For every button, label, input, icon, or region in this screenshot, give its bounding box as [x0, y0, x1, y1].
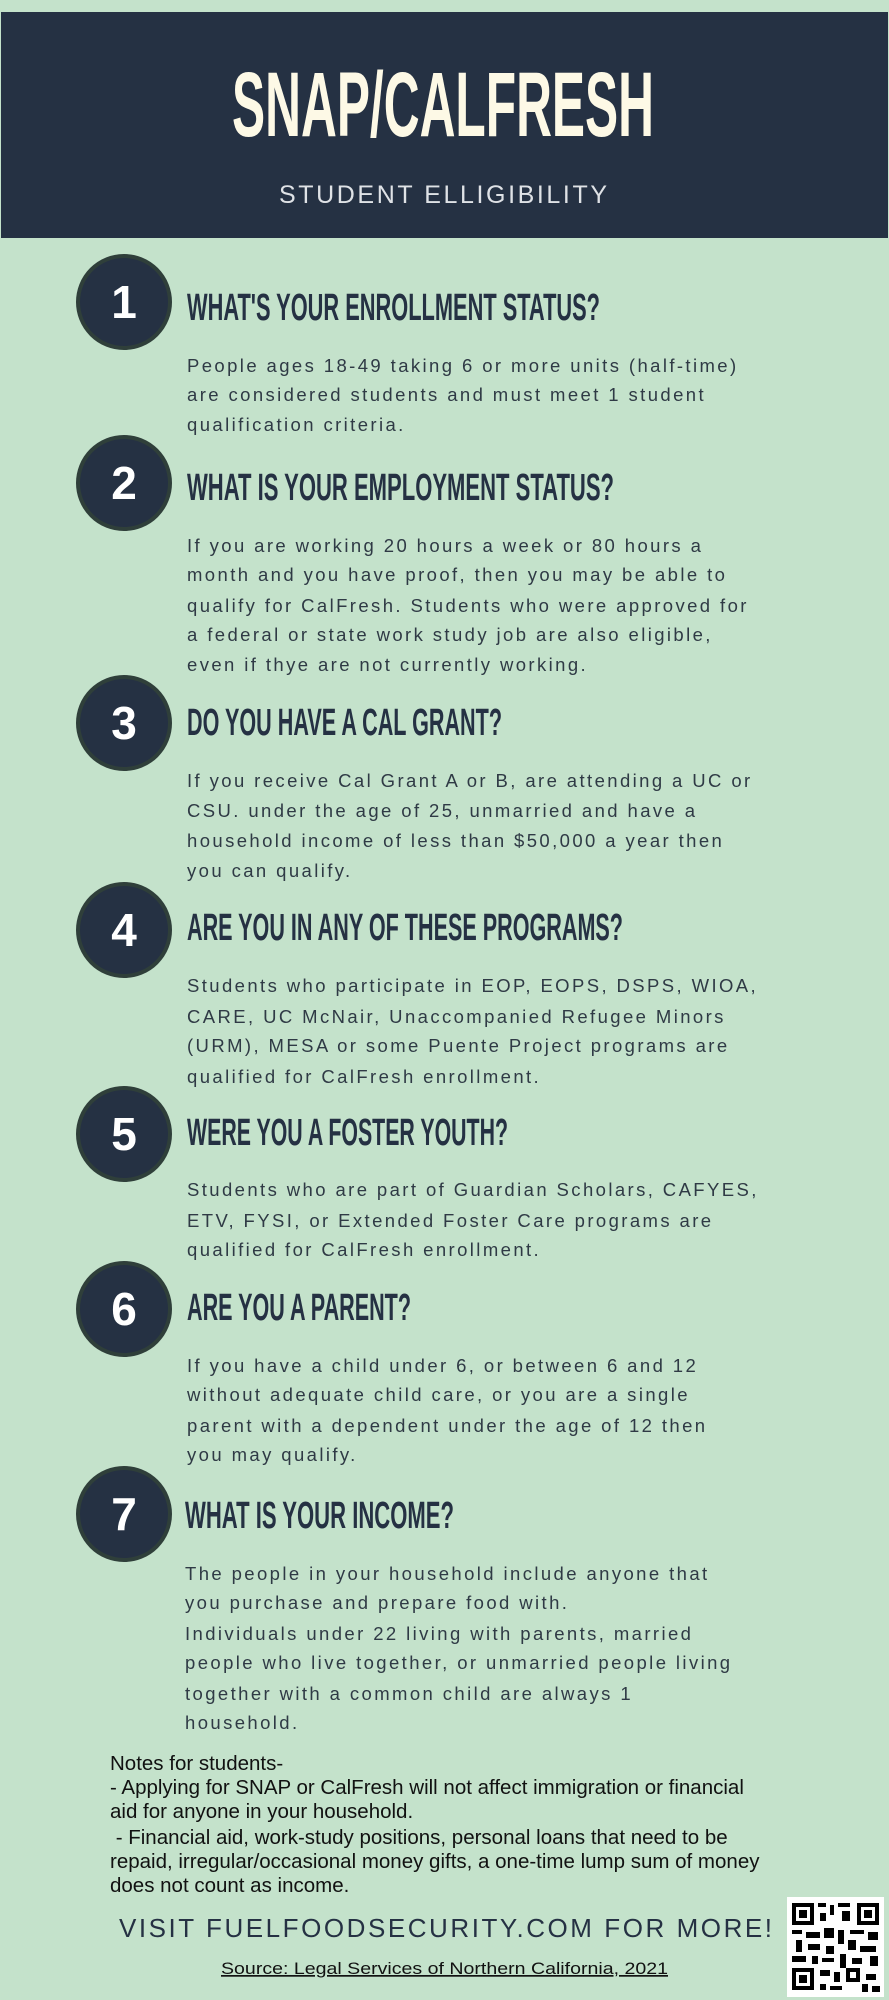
call to action: VISIT FUELFOODSECURITY.COM FOR MORE! — [119, 1913, 772, 1943]
icon: number 7 circle: 7 — [111, 1488, 137, 1540]
body 7: you purchase and prepare food with. — [185, 1592, 569, 1613]
icon: number 6 circle — [78, 1263, 170, 1355]
icon: number 1 circle: 1 — [111, 276, 137, 328]
icon: number 3 circle — [78, 677, 170, 769]
body 1: are considered students and must meet 1 student — [187, 384, 706, 405]
header banner — [1, 12, 888, 238]
notes for students: - Applying for SNAP or CalFresh will not affect immigration or financial — [110, 1776, 744, 1799]
notes for students: does not count as income. — [110, 1874, 349, 1897]
body 5: Students who are part of Guardian Scholars, CAFYES, — [187, 1179, 759, 1200]
body 2: a federal or state work study job are also eligible, — [187, 624, 713, 645]
body 7: The people in your household include anyone that — [185, 1563, 710, 1584]
body 4: qualified for CalFresh enrollment. — [187, 1066, 541, 1087]
section 4: programs — [78, 884, 758, 1087]
icon: number 2 circle: 2 — [111, 457, 137, 509]
notes for students: repaid, irregular/occasional money gifts, a one-time lump sum of money — [110, 1850, 760, 1873]
body 7: together with a common child are always 1 — [185, 1683, 633, 1704]
body 2: qualify for CalFresh. Students who were approved for — [187, 595, 749, 616]
body 2: even if thye are not currently working. — [187, 654, 588, 675]
body 1: qualification criteria. — [187, 414, 406, 435]
body 5: ETV, FYSI, or Extended Foster Care programs are — [187, 1210, 713, 1231]
body 1: People ages 18-49 taking 6 or more units (half-time) — [187, 355, 739, 376]
heading 7: WHAT IS YOUR INCOME? — [185, 1495, 454, 1537]
icon: number 5 circle — [78, 1088, 170, 1180]
section 2: employment — [78, 437, 749, 675]
section 1: enrollment — [78, 256, 739, 435]
body 4: CARE, UC McNair, Unaccompanied Refugee Minors — [187, 1006, 726, 1027]
body 3: household income of less than $50,000 a year then — [187, 830, 724, 851]
heading 1: WHAT'S YOUR ENROLLMENT STATUS? — [187, 287, 600, 329]
section 3: cal grant — [78, 677, 753, 881]
icon: number 7 circle — [78, 1468, 170, 1560]
body 6: without adequate child care, or you are a single — [186, 1384, 690, 1405]
icon: number 4 circle — [78, 884, 170, 976]
icon: number 4 circle: 4 — [111, 904, 137, 956]
heading 5: WERE YOU A FOSTER YOUTH? — [187, 1112, 508, 1154]
body 2: If you are working 20 hours a week or 80 hours a — [187, 535, 703, 556]
body 3: If you receive Cal Grant A or B, are attending a UC or — [187, 770, 753, 791]
heading 3: DO YOU HAVE A CAL GRANT? — [187, 702, 502, 744]
body 6: If you have a child under 6, or between 6 and 12 — [187, 1355, 698, 1376]
subtitle: STUDENT ELLIGIBILITY — [279, 181, 607, 209]
body 3: you can qualify. — [187, 860, 353, 881]
body 2: month and you have proof, then you may be able to — [187, 564, 727, 585]
notes for students: aid for anyone in your household. — [110, 1800, 413, 1823]
icon: number 3 circle: 3 — [111, 697, 137, 749]
icon: number 2 circle — [78, 437, 170, 529]
body 7: household. — [185, 1712, 300, 1733]
notes for students: - Financial aid, work-study positions, personal loans that need to be — [110, 1826, 728, 1849]
body 7: Individuals under 22 living with parents, married — [185, 1623, 693, 1644]
source: Source: Legal Services of Northern California, 2021 — [221, 1959, 668, 1978]
section 7: income — [78, 1468, 732, 1733]
body 3: CSU. under the age of 25, unmarried and have a — [187, 800, 697, 821]
icon: number 5 circle: 5 — [111, 1108, 137, 1160]
section 5: foster youth — [78, 1088, 759, 1260]
body 6: you may qualify. — [187, 1444, 358, 1465]
body 6: parent with a dependent under the age of 12 then — [187, 1415, 707, 1436]
notes for students: Notes for students- — [110, 1752, 283, 1775]
icon: number 6 circle: 6 — [111, 1283, 137, 1335]
section 6: parent — [78, 1263, 707, 1465]
heading 6: ARE YOU A PARENT? — [187, 1287, 411, 1329]
icon: QR code — [787, 1897, 884, 1997]
body 4: (URM), MESA or some Puente Project programs are — [187, 1035, 730, 1056]
body 4: Students who participate in EOP, EOPS, DSPS, WIOA, — [187, 975, 758, 996]
body 7: people who live together, or unmarried people living — [185, 1652, 732, 1673]
icon: number 1 circle — [78, 256, 170, 348]
body 5: qualified for CalFresh enrollment. — [187, 1239, 541, 1260]
